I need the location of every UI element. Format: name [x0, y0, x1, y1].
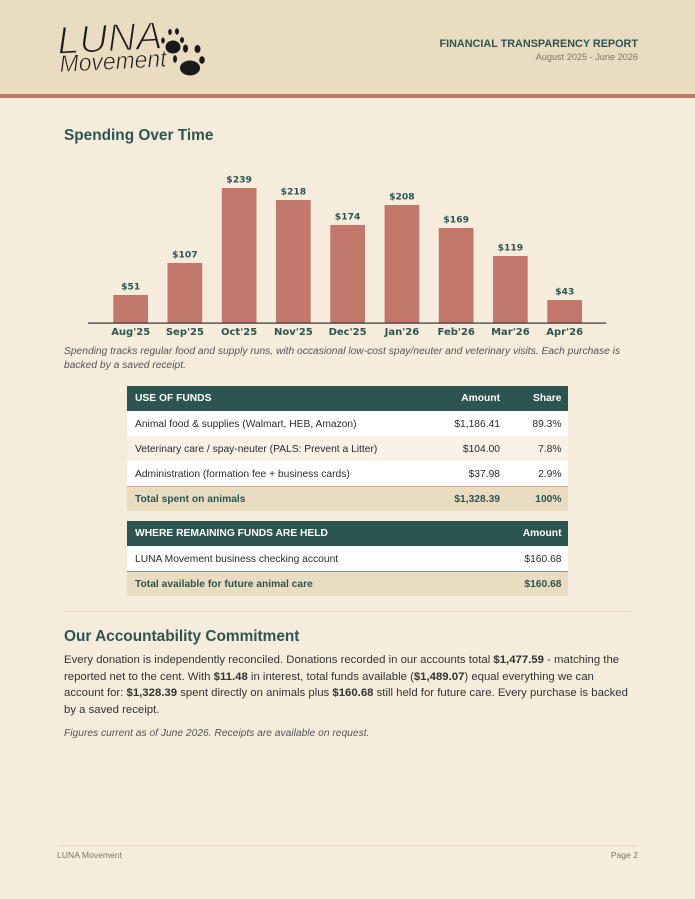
bar chart: Feb'26: [438, 327, 475, 338]
bar chart: Oct'25: [221, 327, 257, 338]
table: use of funds: Total spent on animals: [135, 494, 245, 505]
footer right: Page 2: [611, 850, 638, 860]
table: use of funds: Administration (formation fee + business cards): [135, 469, 350, 480]
table: use of funds: USE OF FUNDS: [135, 393, 211, 404]
bar chart: $51: [121, 282, 140, 293]
table: use of funds: 7.8%: [538, 444, 562, 455]
bar chart: $119: [498, 243, 523, 254]
logo: Movement: [59, 45, 168, 78]
bar chart: $239: [226, 175, 252, 186]
chart caption: Spending tracks regular food and supply runs, with occasional low-cost spay/neuter and veterinary visits. Each purchase is backed by a saved receipt.: [64, 346, 620, 371]
report title: FINANCIAL TRANSPARENCY REPORT: [439, 38, 638, 50]
table: use of funds: Share: [533, 393, 562, 404]
header band: [0, 0, 695, 98]
report period: August 2025 - June 2026: [536, 52, 638, 62]
bar chart: $208: [389, 192, 415, 203]
heading: spending over time: Spending Over Time: [64, 127, 213, 144]
bar chart: Mar'26: [491, 327, 530, 338]
table: remaining funds: LUNA Movement business checking account: [135, 554, 338, 565]
bar chart: Dec'25: [329, 327, 367, 338]
bar chart: $107: [172, 250, 198, 261]
bar chart: Nov'25: [274, 327, 313, 338]
footer left: LUNA Movement: [57, 850, 122, 860]
table: use of funds: $37.98: [469, 469, 500, 480]
table: use of funds: $104.00: [463, 444, 500, 455]
bar chart: $169: [443, 215, 469, 226]
bar chart: Sep'25: [166, 327, 204, 338]
table: use of funds: $1,186.41: [454, 419, 500, 430]
note: Figures current as of June 2026. Receipts are available on request.: [64, 728, 369, 738]
heading: accountability: Our Accountability Commitment: [64, 628, 299, 645]
accent stripe: [0, 94, 695, 98]
table: remaining funds: Total available for future animal care: [135, 579, 313, 590]
icon: paw prints: [161, 28, 205, 76]
table: use of funds: $1,328.39: [454, 494, 500, 505]
table: remaining funds: $160.68: [524, 554, 562, 565]
table: remaining funds: WHERE REMAINING FUNDS ARE HELD: [135, 528, 328, 539]
bar chart: Jan'26: [384, 327, 419, 338]
bar chart: $174: [335, 212, 360, 223]
bar chart: $43: [555, 287, 574, 298]
table: use of funds: Animal food & supplies (Walmart, HEB, Amazon): [135, 419, 357, 430]
table: use of funds: 100%: [535, 494, 562, 505]
table: use of funds: Amount: [461, 393, 500, 404]
bar chart: Aug'25: [111, 327, 150, 338]
table: use of funds: 2.9%: [538, 469, 562, 480]
accountability paragraph: Every donation is independently reconciled. Donations recorded in our accounts total $1,477.59 - matching the reported net to the cent. With $11.48 in interest, total funds available ($1,489.07) equal everything we can account for: $1,328.39 spent directly on animals plus $160.68 still held for future care. Every purchase is backed by a saved receipt.: [64, 654, 628, 716]
bar chart: Apr'26: [546, 327, 583, 338]
table: use of funds: [127, 386, 568, 511]
table: use of funds: 89.3%: [532, 419, 562, 430]
logo: [56, 20, 205, 78]
table: remaining funds: $160.68: [524, 579, 562, 590]
bar chart: $218: [281, 187, 306, 198]
bar chart: [88, 175, 606, 338]
table: use of funds: Veterinary care / spay-neuter (PALS: Prevent a Litter): [135, 444, 377, 455]
table: remaining funds: Amount: [523, 528, 562, 539]
table: remaining funds: [127, 521, 568, 596]
